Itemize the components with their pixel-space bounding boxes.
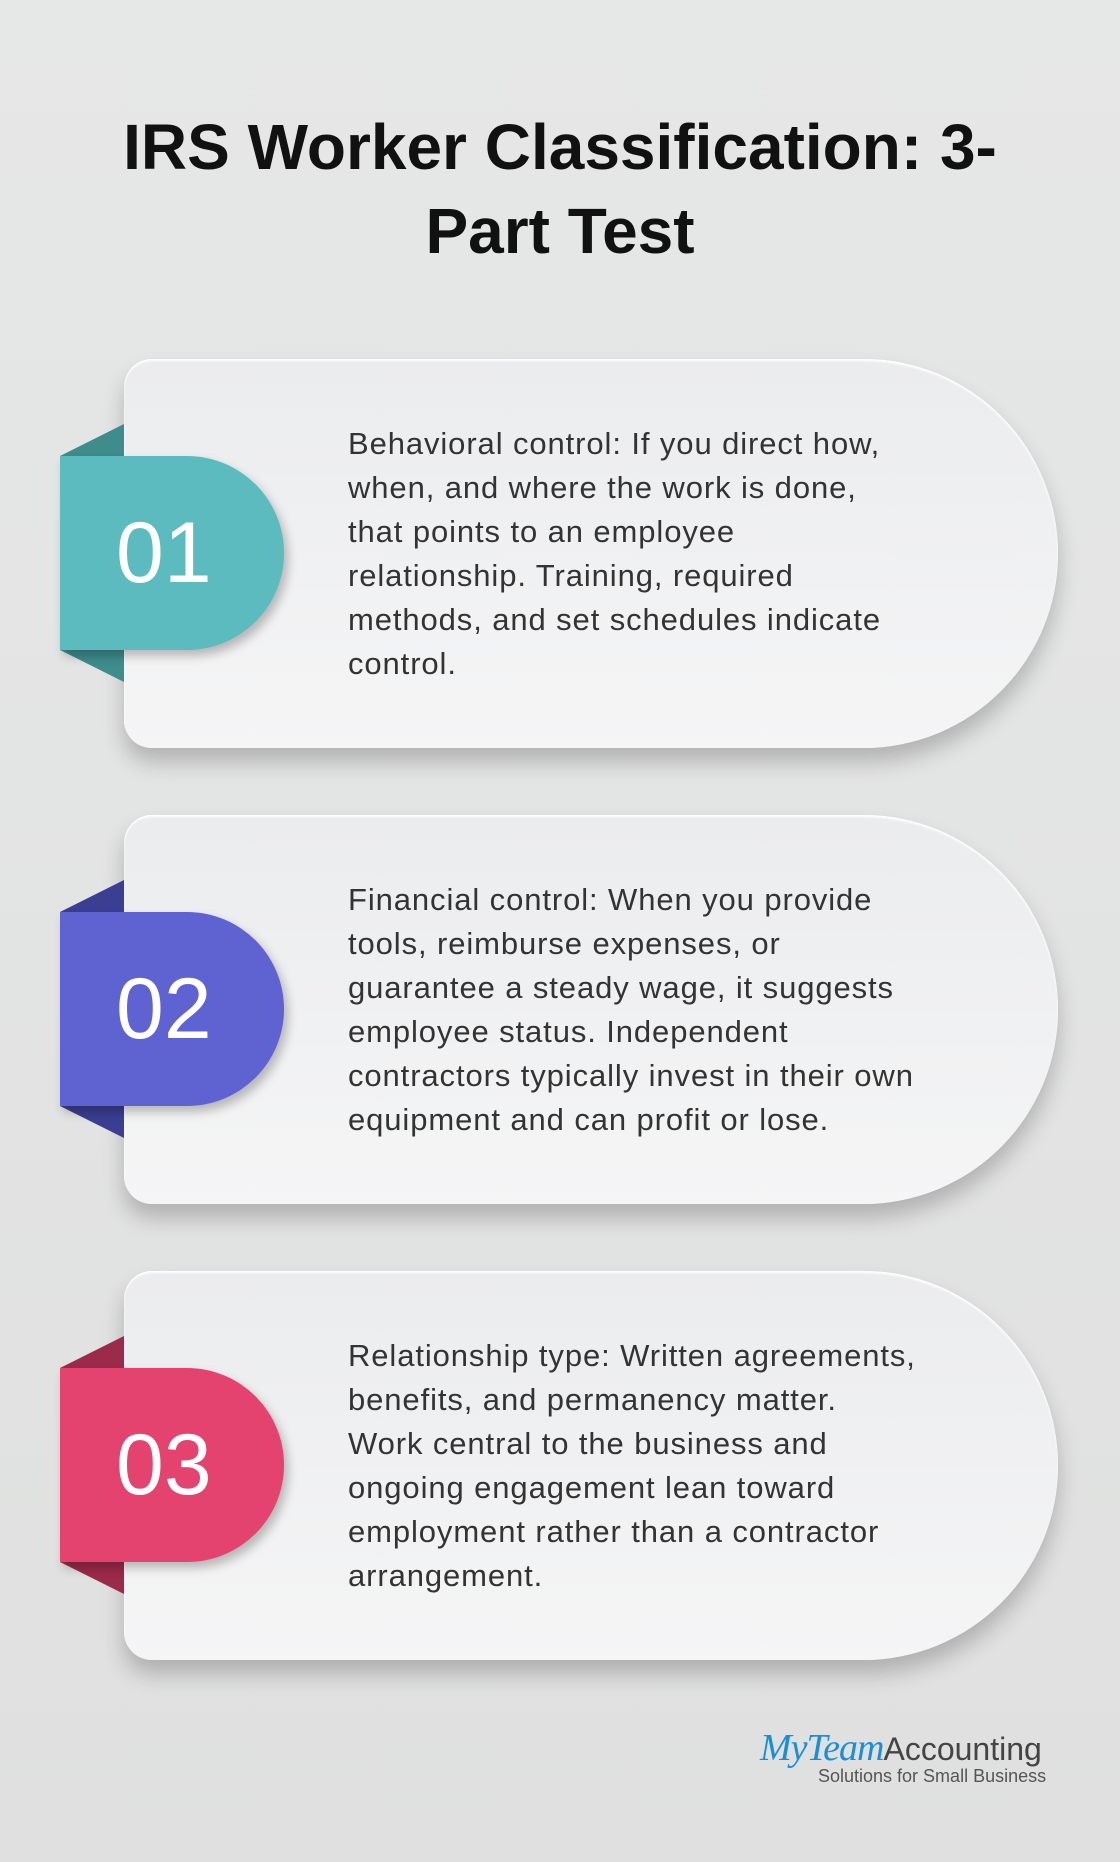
text: relationship type: [348, 1338, 916, 1592]
text: relationship type: Work central to the business and: [348, 1426, 828, 1460]
text: financial control: guarantee a steady wage, it suggests: [348, 970, 894, 1004]
text: behavioral control: Behavioral control: If you direct how,: [348, 426, 880, 460]
text: financial control: tools, reimburse expenses, or: [348, 926, 781, 960]
badge 02: [58, 880, 293, 1138]
text: relationship type: Relationship type: Written agreements,: [348, 1338, 916, 1372]
badge 03: 03: [116, 1416, 212, 1512]
text: behavioral control: that points to an employee: [348, 514, 735, 548]
badge 01: [58, 424, 294, 682]
badge 02: 02: [116, 960, 212, 1056]
text: behavioral control: [348, 426, 881, 680]
badge 03: [59, 1336, 294, 1594]
text: financial control: Financial control: When you provide: [348, 882, 872, 916]
panel: card 3: [124, 1271, 1058, 1660]
text: relationship type: benefits, and permanency matter.: [348, 1382, 837, 1416]
text: behavioral control: control.: [348, 646, 457, 680]
panel: card 2: [124, 815, 1058, 1204]
text: relationship type: ongoing engagement lean toward: [348, 1470, 835, 1504]
logo: Solutions for Small Business: [818, 1766, 1046, 1786]
text: relationship type: employment rather than a contractor: [348, 1514, 879, 1548]
text: financial control: [348, 882, 914, 1136]
text: financial control: contractors typically invest in their own: [348, 1058, 914, 1092]
logo: [760, 1727, 1046, 1786]
text: relationship type: arrangement.: [348, 1558, 543, 1592]
badge 01: 01: [116, 504, 212, 600]
title: Part Test: [425, 195, 695, 267]
panel: card 1: [124, 359, 1058, 748]
text: behavioral control: relationship. Training, required: [348, 558, 794, 592]
text: financial control: employee status. Independent: [348, 1014, 789, 1048]
text: financial control: equipment and can profit or lose.: [348, 1102, 829, 1136]
title: [123, 111, 997, 267]
text: behavioral control: when, and where the work is done,: [348, 470, 857, 504]
text: behavioral control: methods, and set schedules indicate: [348, 602, 881, 636]
title: IRS Worker Classification: 3-: [123, 111, 997, 183]
logo: MyTeamAccounting: [760, 1727, 1042, 1769]
